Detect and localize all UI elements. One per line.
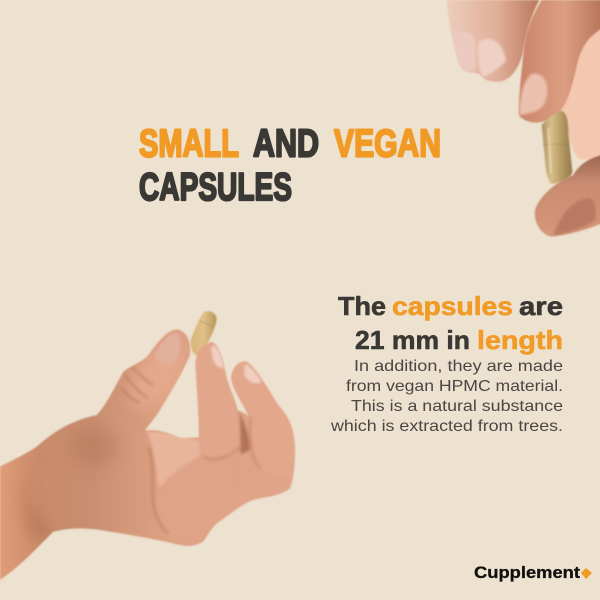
front fingernail [519, 74, 547, 115]
photo: hand holding capsule, bottom left [0, 311, 300, 587]
base of thumb pad [156, 457, 233, 543]
title line 1: VEGAN [334, 122, 441, 166]
knuckle creases [122, 367, 153, 403]
title line 1: AND [253, 122, 319, 166]
heading: capsule length: are [519, 291, 563, 321]
back of hand shade [74, 428, 114, 465]
title [139, 122, 441, 209]
title line 2: CAPSULES [139, 166, 292, 209]
icon: orange diamond [581, 568, 592, 579]
back finger nails [453, 31, 506, 77]
title line 1: SMALL [139, 122, 239, 166]
body text: In addition, they are made [354, 358, 563, 375]
logo: Cupplement [474, 564, 581, 582]
palm crease [148, 447, 168, 533]
heading: capsule length: length [477, 325, 563, 355]
thumb nail [553, 198, 596, 235]
heading: capsule length: capsules [392, 291, 513, 321]
thumb [535, 155, 600, 237]
capsule [542, 111, 572, 184]
body text [330, 358, 563, 435]
lower hand [227, 473, 290, 517]
thumb nail [154, 333, 180, 365]
palm behind fingers [562, 27, 600, 160]
hand silhouette [0, 320, 300, 587]
heading: capsule length: The [338, 291, 386, 321]
ring finger nail [244, 364, 262, 383]
thumb light [132, 358, 170, 405]
wrist shade [22, 496, 50, 538]
middle finger [195, 342, 240, 460]
heading: capsule length [338, 291, 563, 355]
photo: fingers holding capsule, top right [447, 0, 600, 237]
capsule [191, 311, 217, 355]
title line 1 [139, 122, 441, 166]
back fingers [447, 0, 539, 82]
front finger [519, 0, 600, 123]
body text: from vegan HPMC material. [346, 378, 563, 395]
body text: This is a natural substance [351, 398, 563, 415]
finger nail [211, 346, 224, 368]
body text: which is extracted from trees. [330, 418, 563, 435]
ring finger [231, 361, 295, 480]
heading: capsule length: 21 mm in [355, 325, 470, 355]
finger shadow [239, 412, 250, 454]
palm [147, 432, 200, 490]
